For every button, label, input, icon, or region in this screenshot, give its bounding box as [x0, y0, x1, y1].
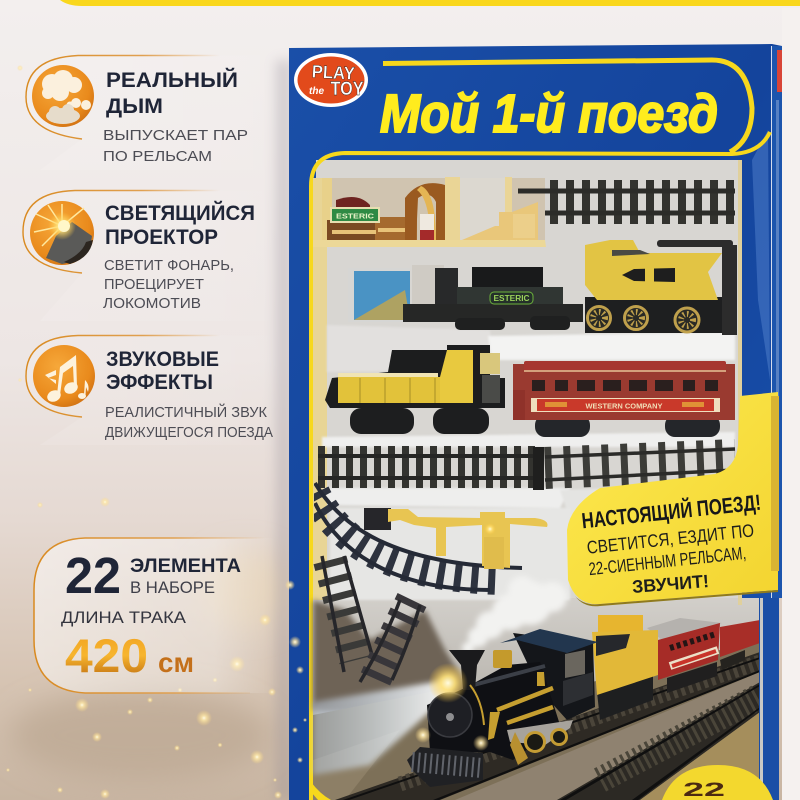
top yellow bar: [60, 0, 800, 6]
station shelf: [313, 177, 546, 247]
red coach: WESTERN COMPANY: [586, 402, 662, 410]
coach band: [531, 398, 720, 412]
icon: smoke: [32, 65, 94, 127]
title band line: [383, 60, 752, 152]
inner cream frame: [313, 178, 327, 600]
panel: set size and track length: [34, 538, 275, 693]
description: ЛОКОМОТИВ: [103, 295, 201, 312]
cover backdrop: [313, 598, 763, 800]
elements label: ЭЛЕМЕНТА: [130, 556, 241, 577]
description: ВЫПУСКАЕТ ПАР: [103, 127, 248, 144]
tender label: [490, 292, 533, 304]
icon: lamp: [30, 201, 94, 265]
heading: [106, 347, 219, 394]
second track bed: [557, 682, 760, 800]
light beam: [313, 680, 452, 775]
smokestack: [449, 650, 485, 690]
yellow signal: [364, 508, 548, 569]
station sign: ESTERIC: [336, 212, 375, 220]
upper track: [518, 191, 735, 213]
headlight: [428, 663, 468, 703]
smokebox face: [428, 693, 472, 737]
coach windows: [532, 380, 718, 391]
lower-left tracks: [322, 556, 420, 682]
cowcatcher: [407, 747, 483, 787]
icon: musical notes: [33, 345, 95, 407]
chassis silver: [507, 720, 573, 745]
middle track: [318, 447, 735, 490]
yellow callout: [567, 392, 779, 606]
description: [105, 403, 273, 441]
steam locomotive: [407, 629, 598, 787]
callout body: СВЕТИТСЯ, ЕЗДИТ ПО: [586, 520, 755, 558]
sparkles: [6, 65, 307, 799]
luggage: [336, 197, 370, 240]
gold trim: [497, 688, 553, 723]
black tender: ESTERIC: [494, 294, 530, 303]
black tender: [403, 267, 583, 330]
red coach: [513, 361, 735, 437]
stairs: [462, 202, 538, 240]
blue frame over scene: [759, 598, 779, 800]
heading: СВЕТЯЩИЙСЯ: [105, 200, 255, 225]
station sign: [330, 207, 380, 223]
box shadow: [276, 60, 292, 800]
blue card: [348, 265, 444, 322]
tender car: [592, 615, 658, 720]
track length label: ДЛИНА ТРАКА: [61, 608, 187, 627]
yellow diesel: [325, 345, 505, 434]
description: ДВИЖУЩЕГОСЯ ПОЕЗДА: [105, 424, 273, 441]
heading: ПРОЕКТОР: [105, 225, 218, 249]
description: РЕАЛИСТИЧНЫЙ ЗВУК: [105, 403, 267, 421]
curved track: [315, 483, 522, 590]
brand logo: [294, 53, 368, 107]
heading: [106, 67, 238, 118]
wheels: [588, 306, 699, 332]
cover rubble mound: [313, 600, 470, 720]
description: СВЕТИТ ФОНАРЬ,: [104, 257, 234, 274]
ground: [313, 640, 760, 800]
panel: sound effects: [26, 336, 285, 445]
window frame: [311, 132, 770, 800]
heading: [105, 200, 255, 249]
cover scene: [313, 576, 779, 800]
heading: ЭФФЕКТЫ: [106, 370, 213, 394]
callout body: ЗВУЧИТ!: [631, 571, 710, 597]
display window: [311, 132, 779, 800]
window yellow corner: [311, 782, 331, 800]
brand logo: PLAY: [311, 61, 355, 84]
steam cloud: [462, 576, 567, 654]
first track bed: [335, 652, 760, 800]
coach far: [720, 620, 760, 670]
right ground: [640, 712, 760, 800]
coach near: [647, 618, 722, 693]
panel: real smoke: [26, 56, 285, 170]
track length value: 420: [65, 629, 148, 682]
box sheen: [752, 130, 770, 380]
description: [103, 257, 234, 312]
callout body: 22-СИЕННЫМ РЕЛЬСАМ,: [588, 543, 747, 579]
title: Мой 1-й поезд: [380, 84, 718, 144]
box side strip: [771, 46, 782, 598]
callout body: [586, 520, 755, 597]
bottom badge: [662, 765, 773, 800]
description: ПО РЕЛЬСАМ: [103, 148, 212, 165]
arch: [405, 183, 445, 240]
wheels: [510, 732, 528, 765]
brand logo: the: [309, 86, 324, 97]
brand logo: TOY: [330, 79, 364, 100]
heading: РЕАЛЬНЫЙ: [106, 67, 238, 92]
description: [103, 127, 248, 165]
description: ПРОЕЦИРУЕТ: [104, 276, 204, 293]
dome: [493, 650, 512, 668]
gravel: [455, 672, 760, 800]
panel: glowing projector: [23, 190, 285, 321]
heading: ЗВУКОВЫЕ: [106, 347, 219, 371]
cab: [513, 633, 595, 720]
boiler: [427, 662, 560, 760]
unit: см: [158, 647, 194, 678]
yellow locomotive: [585, 240, 737, 335]
foam bands: [322, 325, 735, 600]
hazy lower background: [10, 550, 290, 780]
small lamps: [415, 727, 431, 743]
heading: ДЫМ: [106, 94, 163, 118]
number of elements: 22: [65, 547, 121, 604]
right page margin: [782, 8, 800, 800]
set label: В НАБОРЕ: [130, 578, 215, 597]
